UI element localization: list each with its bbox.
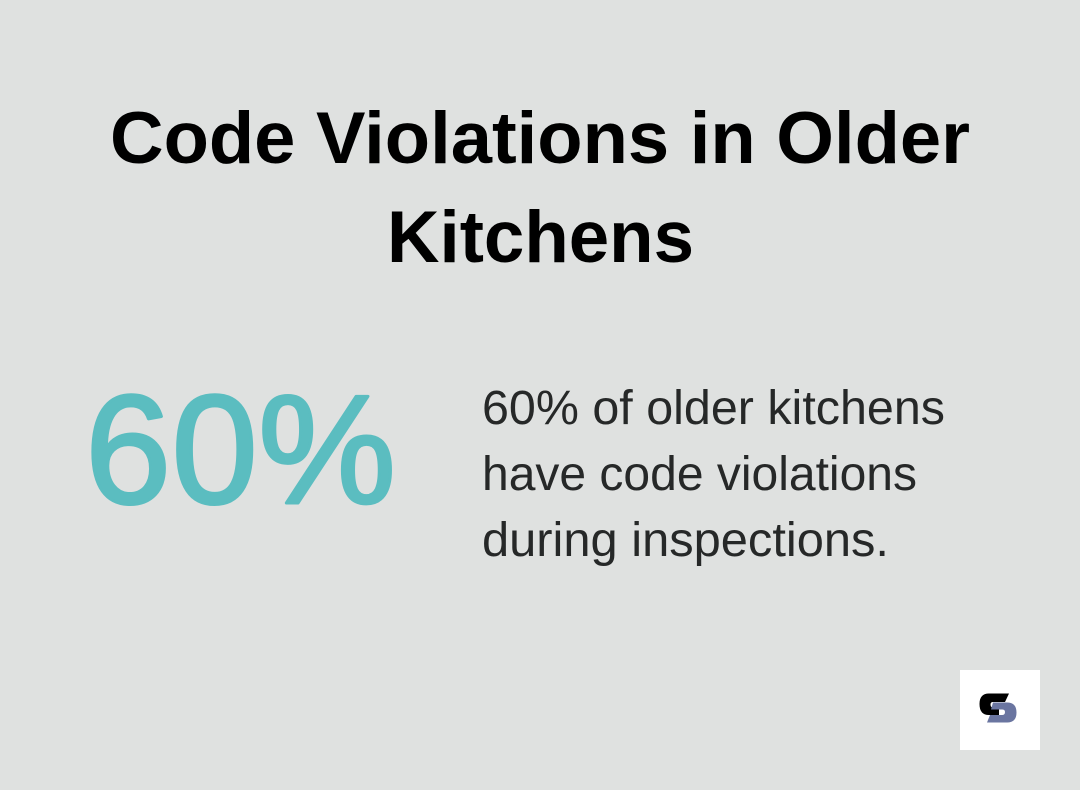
- title: Kitchens: [387, 197, 694, 278]
- statistic description: 60% of older kitchens: [482, 382, 945, 435]
- icon: logo mark: [980, 694, 1016, 722]
- title: Code Violations in Older: [110, 98, 970, 179]
- logo badge: [960, 670, 1040, 750]
- big statistic: 60%: 60%: [85, 363, 396, 536]
- statistic description: have code violations: [482, 448, 917, 501]
- statistic description: [482, 382, 945, 567]
- statistic description: during inspections.: [482, 514, 889, 567]
- title: [110, 98, 970, 278]
